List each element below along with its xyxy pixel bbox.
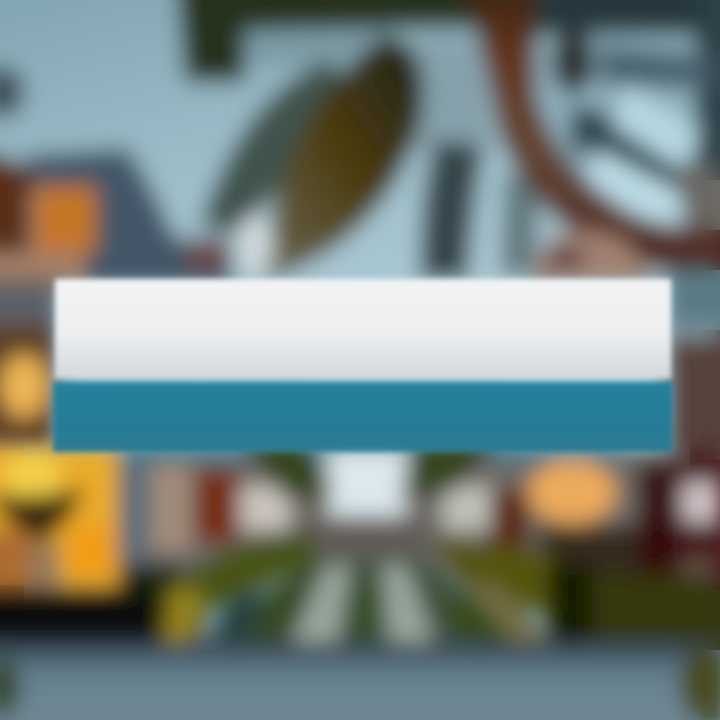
sign lower centre [30, 545, 60, 585]
banner: teal band [53, 382, 673, 452]
water [0, 642, 720, 720]
lower base [0, 452, 720, 577]
left path [288, 565, 350, 650]
left green frond [240, 440, 335, 498]
gray brown [680, 560, 714, 590]
centre bright opening [328, 450, 406, 516]
banner: white panel [55, 279, 671, 379]
distant mountain [25, 148, 232, 288]
mountain base blob [185, 237, 231, 275]
right swirl top shadow [530, 0, 720, 35]
right strip top [665, 270, 720, 330]
haze between fronds [240, 25, 390, 65]
maroon right [680, 450, 720, 590]
right green bed [438, 600, 522, 652]
left strip [0, 280, 60, 330]
right strip bottom [665, 335, 720, 460]
swirl light patch lower [580, 150, 695, 240]
left olive hedge [160, 530, 322, 615]
orange glow [528, 460, 616, 524]
brown column right [490, 490, 528, 580]
bottom left plant [0, 660, 20, 716]
right green frond [400, 440, 500, 498]
light window [682, 482, 720, 522]
sign lower right [68, 526, 114, 576]
top dark frond [175, 0, 560, 82]
small frond [500, 175, 540, 275]
swirl second stroke [600, 45, 710, 90]
right swirl background [530, 0, 720, 220]
right path [382, 565, 436, 650]
light patches at frond base [237, 215, 273, 275]
maroon building [638, 462, 686, 592]
bottom right plant edge [702, 655, 720, 720]
left glow [0, 354, 48, 418]
walkway base [205, 560, 555, 655]
orange window [34, 186, 96, 252]
yellow stripe [162, 590, 202, 645]
teal shrub [208, 588, 264, 648]
centre green strip [350, 582, 380, 654]
tan wall [150, 465, 192, 550]
right swirl side shadow [695, 0, 720, 180]
swirl lower shadow [675, 165, 720, 250]
sign heart [0, 485, 84, 546]
teal strip remnant [110, 445, 620, 460]
far right hedge [592, 575, 720, 653]
main frond [265, 35, 423, 280]
orange lower [0, 252, 85, 288]
upper scene: sky, palms and buildings [0, 0, 720, 460]
sky background [0, 0, 720, 460]
light wall left [240, 486, 290, 530]
blue gray column [112, 452, 148, 562]
centre frond [420, 140, 484, 280]
far right very dark shrub [548, 565, 594, 653]
walkway head [300, 520, 425, 565]
left strip brown [0, 325, 60, 455]
bottom right plant [680, 650, 720, 720]
left orange building [0, 135, 32, 288]
tan stripe [466, 585, 550, 642]
left green bed [240, 565, 315, 652]
haze behind centre frond [400, 40, 490, 150]
red brick column [195, 470, 239, 542]
sign lower left [0, 530, 30, 585]
roof shadow [545, 243, 585, 273]
curved palm trunk [450, 0, 720, 273]
lower scene: buildings, garden and walkway [0, 440, 720, 720]
garden dark band [120, 565, 180, 595]
right roof [530, 231, 655, 285]
left frond [200, 60, 365, 235]
swirl dark stroke [570, 105, 712, 215]
left dark blob [0, 66, 24, 118]
swirl light patch upper [612, 85, 700, 172]
dark brown right [540, 525, 650, 575]
right olive hedge [426, 535, 556, 612]
dark ground [0, 588, 202, 660]
yellow sign [0, 446, 118, 586]
light wall right [443, 486, 493, 530]
sign highlight [2, 452, 62, 504]
swirl dark blob [551, 30, 595, 94]
